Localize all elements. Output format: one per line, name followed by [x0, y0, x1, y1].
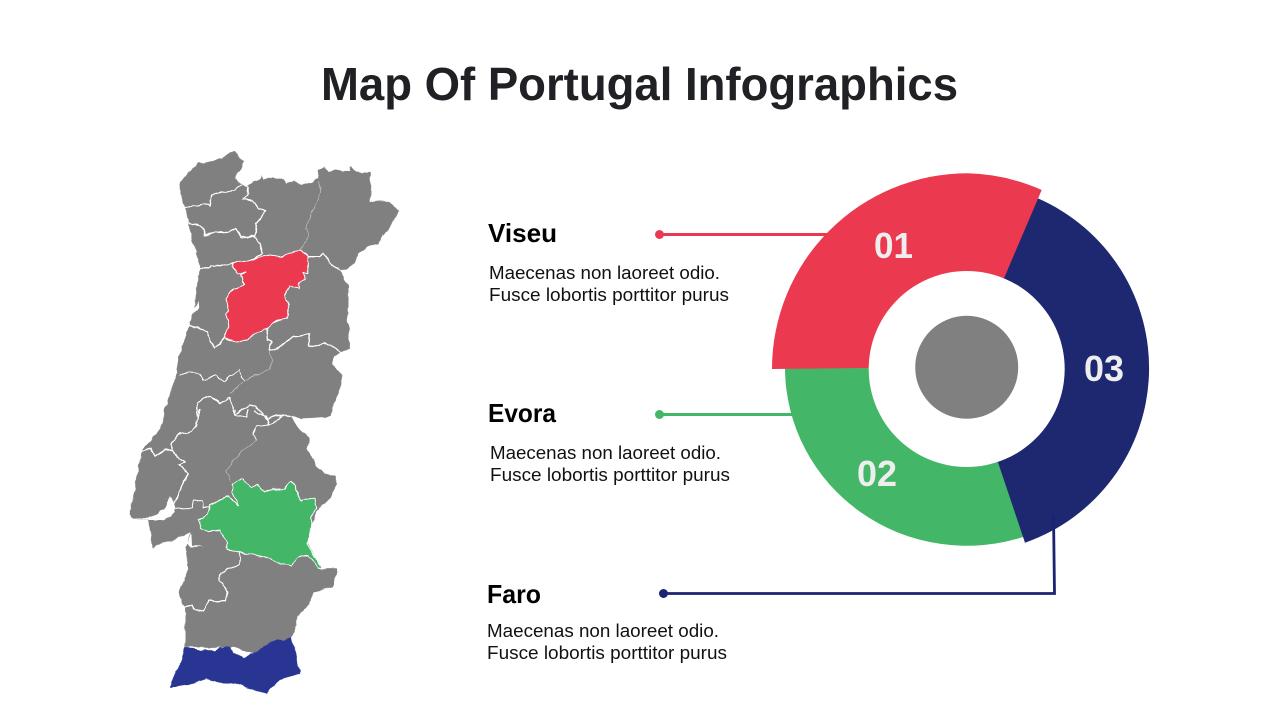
text: Faro description [487, 620, 727, 663]
label block: Faro [487, 579, 727, 663]
donut chart [772, 173, 1149, 546]
text: Viseu description: Fusce lobortis porttitor purus [489, 284, 729, 305]
map: thin borders [226, 182, 321, 482]
segment 01: red [772, 173, 1042, 369]
map: region borders [141, 185, 340, 612]
heading: Viseu: Viseu [488, 218, 557, 248]
centre circle [915, 316, 1018, 419]
segment 03: navy [966, 198, 1149, 543]
map region: Faro [170, 637, 300, 693]
segment 02: green [785, 367, 1026, 546]
map region: Viseu [224, 250, 308, 342]
text: Faro description: Fusce lobortis porttitor purus [487, 642, 727, 663]
donut hole [869, 271, 1065, 467]
text: Viseu description [489, 262, 729, 305]
number 02: 02 [857, 453, 897, 494]
number 03: 03 [1084, 348, 1124, 389]
heading: Faro: Faro [487, 579, 541, 609]
number 01: 01 [874, 225, 913, 266]
connector: Faro [659, 515, 1054, 598]
map: grey regions [130, 152, 399, 653]
label block: Evora [488, 398, 730, 485]
map region: Evora [199, 479, 323, 568]
map: estuaries [132, 302, 203, 547]
connector: Evora [655, 410, 796, 419]
text: Evora description: Maecenas non laoreet odio. [490, 442, 721, 463]
text: Viseu description: Maecenas non laoreet odio. [489, 262, 720, 283]
connector: Viseu [655, 230, 830, 239]
map of Portugal [130, 152, 399, 693]
label block: Viseu [488, 218, 729, 305]
heading: Evora: Evora [488, 398, 557, 428]
text: Evora description [490, 442, 730, 485]
title: Map Of Portugal Infographics [321, 58, 958, 110]
text: Faro description: Maecenas non laoreet odio. [487, 620, 719, 641]
text: Evora description: Fusce lobortis porttitor purus [490, 464, 730, 485]
